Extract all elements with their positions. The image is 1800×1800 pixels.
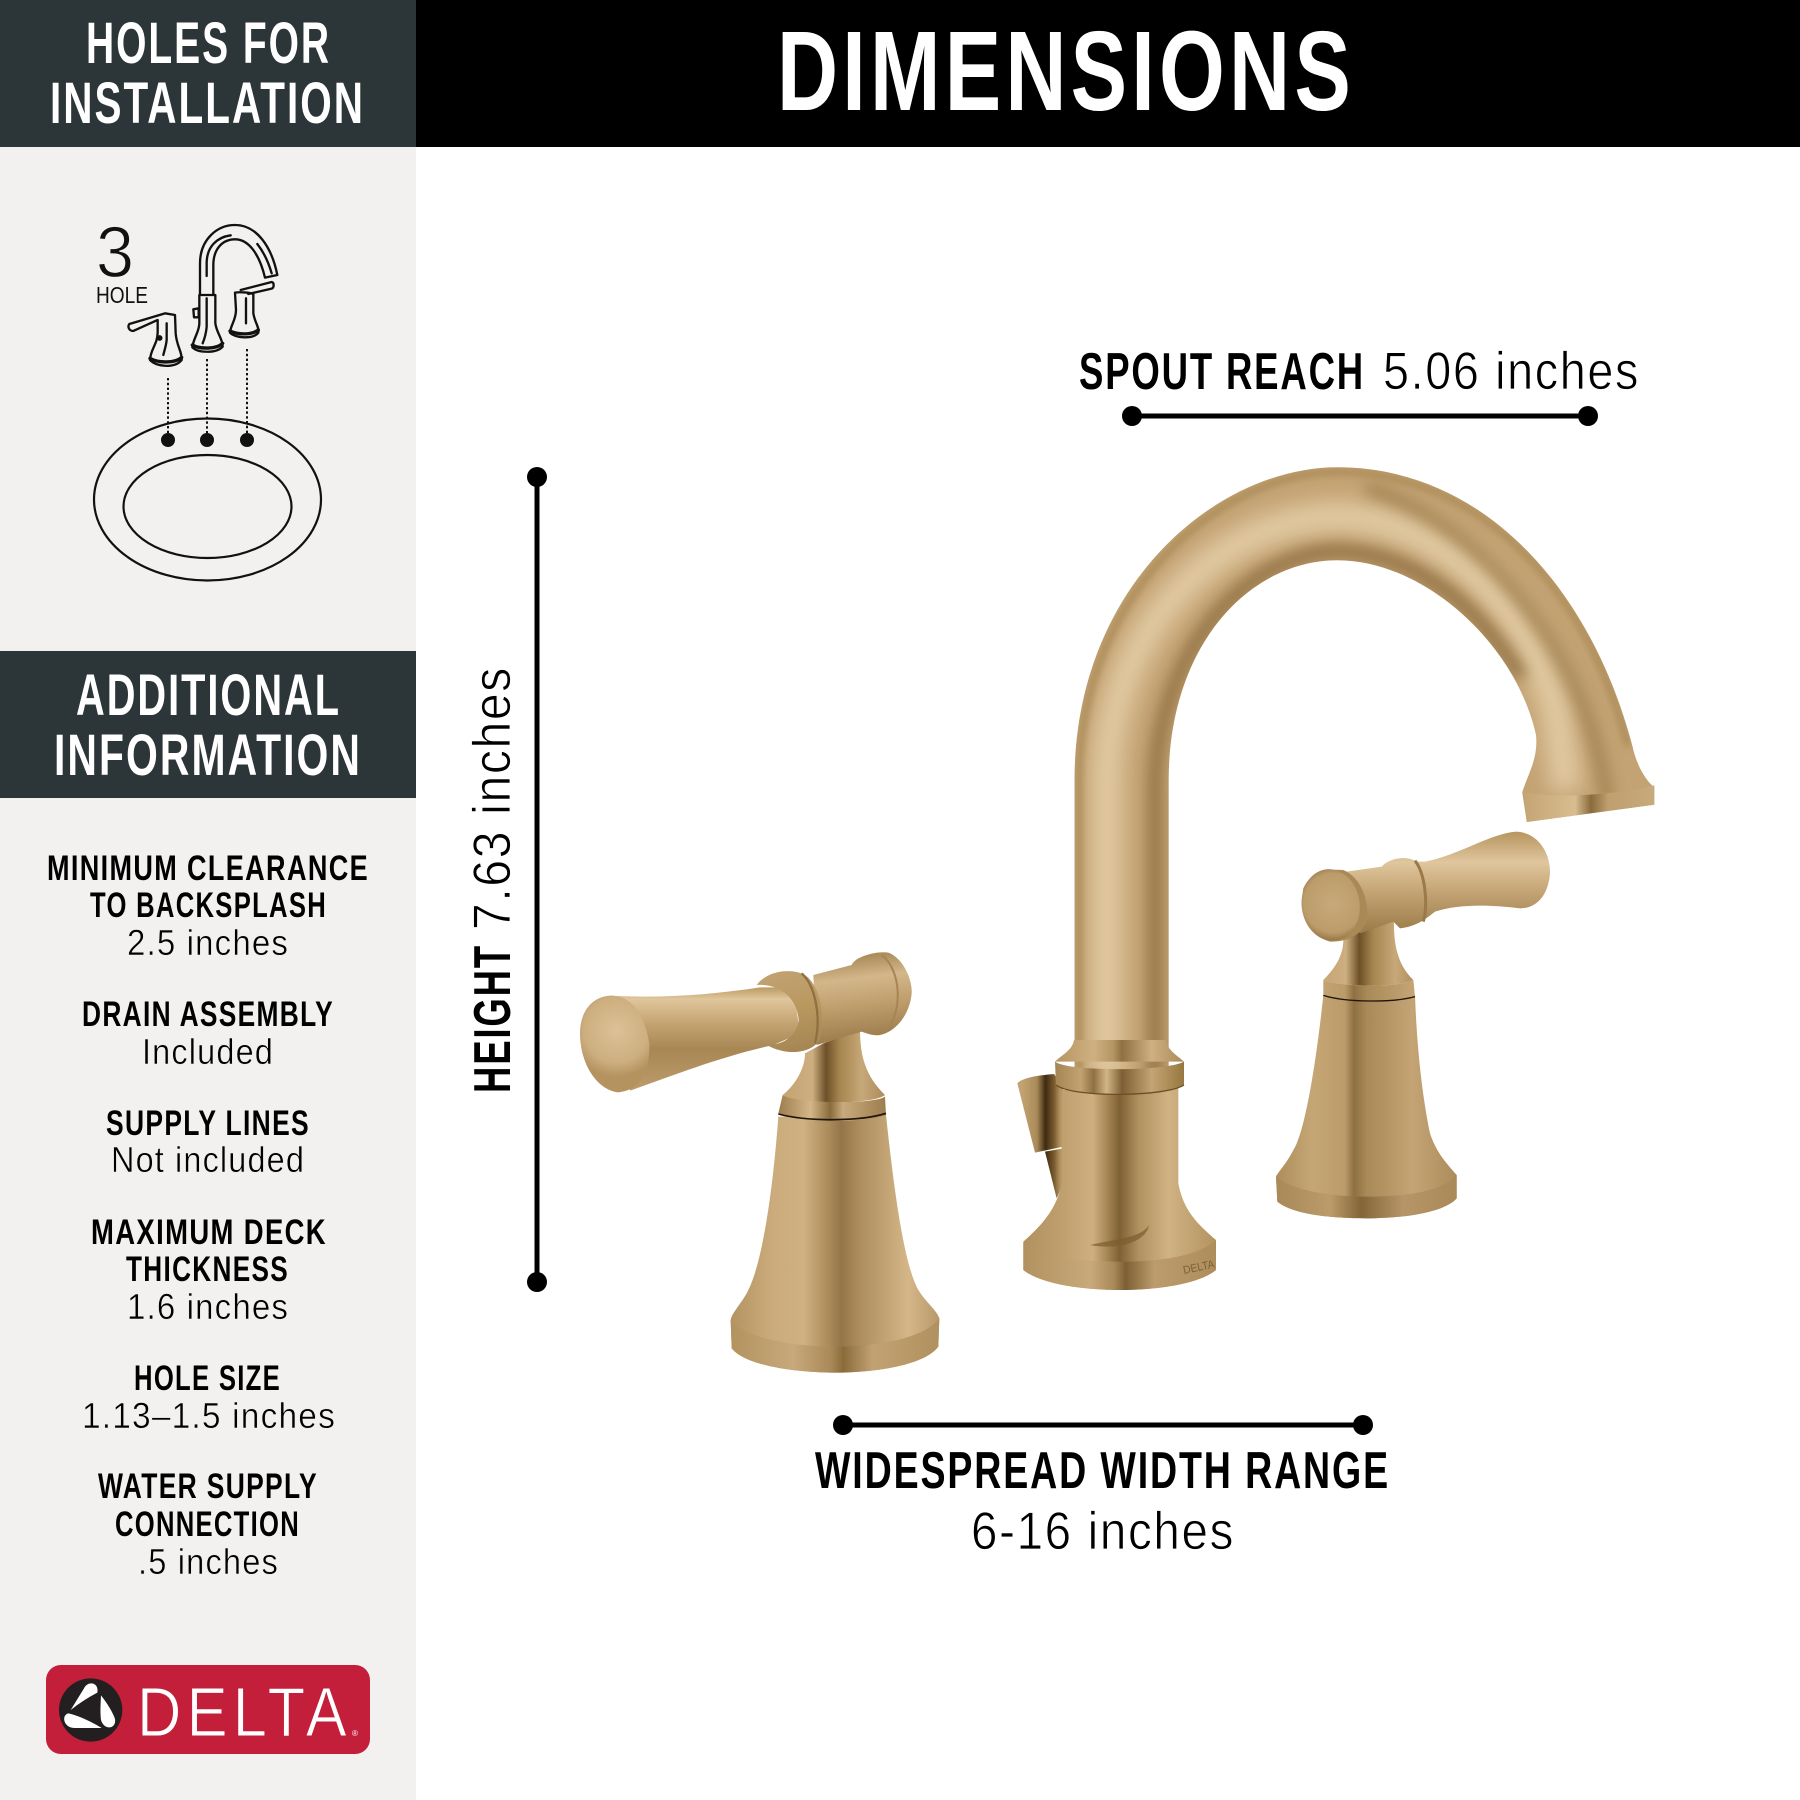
heading: additional information: ADDITIONAL	[76, 663, 341, 728]
label: 3 hole	[96, 213, 148, 308]
logo mark	[59, 1678, 122, 1742]
spec: maximum deck thickness: 1.6 inches	[127, 1286, 289, 1327]
spec: minimum clearance: 2.5 inches	[127, 922, 289, 963]
spec: drain assembly	[82, 995, 334, 1072]
center valve body and drain rod	[1017, 1040, 1216, 1290]
heading: holes for installation: INSTALLATION	[50, 71, 365, 136]
spec: supply lines	[106, 1104, 310, 1180]
heading: additional information	[0, 651, 416, 798]
spec: water supply connection: .5 inches	[138, 1541, 279, 1582]
icon: line drawing of faucet	[129, 225, 277, 366]
logo wordmark: DELTA	[137, 1673, 352, 1751]
dimension: spout reach: 5.06 inches	[1383, 342, 1640, 401]
label: 3 hole: 3	[96, 213, 134, 293]
left handle	[580, 952, 939, 1373]
spec: minimum clearance	[47, 849, 369, 963]
faucet spout	[1075, 467, 1654, 1085]
spec: water supply connection	[98, 1467, 318, 1582]
spec: water supply connection: WATER SUPPLY	[98, 1467, 318, 1506]
spec: drain assembly: DRAIN ASSEMBLY	[82, 995, 334, 1034]
dimension: height: HEIGHT	[464, 944, 522, 1093]
spec: maximum deck thickness: MAXIMUM DECK	[91, 1213, 327, 1252]
spec: hole size	[82, 1359, 336, 1436]
right handle	[1276, 832, 1550, 1218]
spec: minimum clearance: MINIMUM CLEARANCE	[47, 849, 369, 888]
icon: three hole faucet and sink diagram	[94, 213, 321, 580]
spec: supply lines: SUPPLY LINES	[106, 1104, 310, 1143]
heading: additional information: INFORMATION	[54, 723, 362, 788]
spec: drain assembly: Included	[142, 1031, 274, 1072]
text block: additional information list	[47, 849, 369, 1582]
spec: maximum deck thickness	[91, 1213, 327, 1327]
header band: dimensions title	[416, 0, 1800, 147]
dimension: height	[463, 467, 547, 1292]
mounting holes	[161, 433, 254, 447]
label: 3 hole: HOLE	[96, 282, 148, 308]
spout nozzle ring	[1522, 785, 1654, 822]
dotted guide lines	[168, 349, 247, 436]
dimension: widespread width range: WIDESPREAD WIDTH RANGE	[815, 1442, 1390, 1500]
sink basin	[94, 418, 321, 580]
dimension: spout reach: SPOUT REACH	[1079, 343, 1365, 401]
heading: holes for installation	[0, 0, 416, 147]
spec: supply lines: Not included	[111, 1139, 305, 1180]
faucet illustration	[580, 467, 1654, 1373]
title: DIMENSIONS	[777, 8, 1355, 134]
heading: holes for installation: HOLES FOR	[86, 11, 331, 76]
dimension: spout reach	[1079, 342, 1640, 426]
dimension: widespread width range: 6-16 inches	[971, 1502, 1235, 1561]
spec: hole size: HOLE SIZE	[134, 1359, 281, 1398]
spec: water supply connection: CONNECTION	[115, 1505, 300, 1544]
logo: delta: ®	[352, 1729, 358, 1738]
logo: delta	[46, 1665, 370, 1754]
dimension: height: 7.63 inches	[463, 666, 522, 930]
embossed brand mark on base: DELTA	[1182, 1259, 1216, 1277]
spec: minimum clearance: TO BACKSPLASH	[90, 886, 327, 925]
spec: hole size: 1.13–1.5 inches	[82, 1395, 336, 1436]
spec: maximum deck thickness: THICKNESS	[126, 1250, 289, 1289]
dimension: widespread width range	[815, 1415, 1390, 1561]
panel: left sidebar background	[0, 0, 416, 1800]
